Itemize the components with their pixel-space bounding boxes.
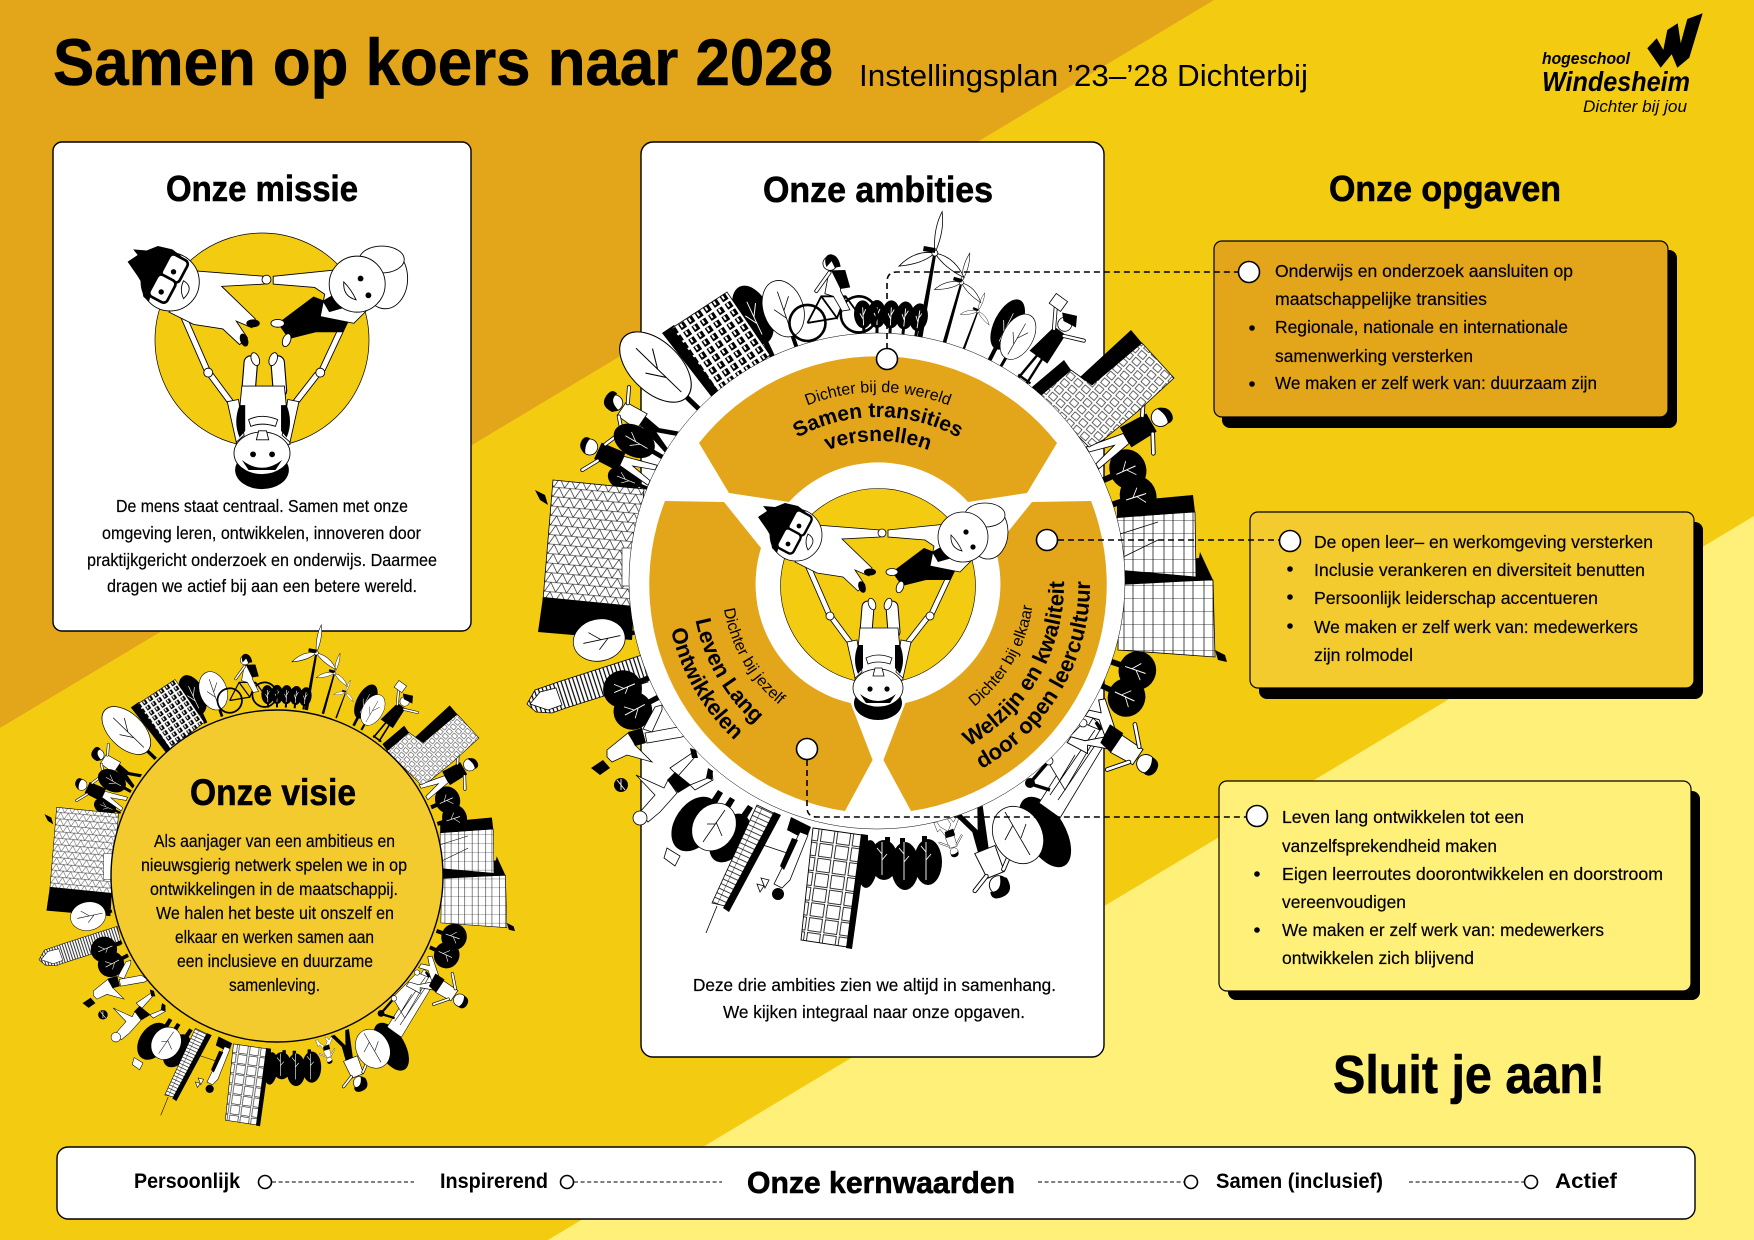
text: visie bbox=[141, 831, 407, 995]
panel: onze kernwaarden bbox=[57, 1147, 1695, 1219]
connector: jezelf to opgave 3 bbox=[796, 738, 1268, 826]
panel: opgave 2: zijn rolmodel bbox=[1314, 645, 1413, 665]
value: samen (inclusief): Samen (inclusief) bbox=[1216, 1170, 1383, 1193]
panel: opgave 1 bbox=[1214, 241, 1677, 428]
logo: Windesheim: Windesheim bbox=[1542, 66, 1690, 97]
visie disc bbox=[111, 710, 443, 1042]
segment: welzijn en kwaliteit: Welzijn en kwaliteit bbox=[960, 581, 1064, 745]
text: missie: omgeving leren, ontwikkelen, innoveren door bbox=[102, 523, 421, 543]
logo: Windesheim: Dichter bij jou bbox=[1583, 97, 1688, 116]
panel: onze missie bbox=[53, 142, 471, 631]
illustration: ring of city and people bbox=[527, 206, 1227, 949]
segment: leven lang ontwikkelen bbox=[649, 501, 873, 811]
segment: samen transities versnellen: Samen transities bbox=[793, 403, 962, 436]
text: visie: ontwikkelingen in de maatschappij. bbox=[150, 879, 398, 899]
value: inspirerend: Inspirerend bbox=[440, 1170, 548, 1193]
panel: opgave 3: vereenvoudigen bbox=[1282, 892, 1406, 912]
title: Samen op koers naar 2028 bbox=[53, 25, 833, 99]
segment: leven lang ontwikkelen: Ontwikkelen bbox=[672, 628, 740, 740]
segment: samen transities versnellen: versnellen bbox=[824, 426, 930, 450]
text: ambities samenhang bbox=[693, 975, 1056, 1022]
text: missie: De mens staat centraal. Samen met onze bbox=[116, 496, 408, 516]
call to action: Sluit je aan! bbox=[1333, 1045, 1605, 1105]
text: visie: een inclusieve en duurzame bbox=[177, 951, 373, 971]
text: ambities samenhang: We kijken integraal naar onze opgaven. bbox=[723, 1002, 1025, 1022]
segment: samen transities versnellen bbox=[699, 356, 1057, 502]
panel: opgave 1: We maken er zelf werk van: duurzaam zijn bbox=[1275, 373, 1597, 393]
segment: leven lang ontwikkelen: Leven Lang bbox=[696, 618, 762, 725]
panel: opgave 1: Regionale, nationale en internationale bbox=[1275, 317, 1568, 337]
panel: opgave 1: maatschappelijke transities bbox=[1275, 289, 1487, 309]
text: visie: We halen het beste uit onszelf en bbox=[156, 903, 394, 923]
panel: opgave 2: Inclusie verankeren en diversiteit benutten bbox=[1314, 560, 1645, 580]
segment: welzijn en kwaliteit: door open leercultuur bbox=[978, 582, 1090, 768]
illustration: three people holding hands bbox=[758, 503, 1008, 720]
panel: opgave 2: De open leer– en werkomgeving versterken bbox=[1314, 532, 1653, 552]
value: persoonlijk: Persoonlijk bbox=[134, 1170, 240, 1193]
panel: opgave 3: We maken er zelf werk van: medewerkers bbox=[1282, 920, 1604, 940]
text: missie: dragen we actief bij aan een betere wereld. bbox=[107, 576, 417, 596]
segment: leven lang ontwikkelen: Dichter bij jezelf bbox=[724, 608, 787, 704]
logo: Windesheim: hogeschool bbox=[1542, 49, 1631, 68]
panel: opgave 3: Leven lang ontwikkelen tot een bbox=[1282, 807, 1524, 827]
value: persoonlijk bbox=[134, 1170, 414, 1193]
panel: opgave 3: ontwikkelen zich blijvend bbox=[1282, 948, 1474, 968]
text: ambities samenhang: Deze drie ambities zien we altijd in samenhang. bbox=[693, 975, 1056, 995]
panel: opgave 1: samenwerking versterken bbox=[1275, 346, 1473, 366]
panel: onze visie bbox=[39, 621, 515, 1126]
panel: opgave 3: Eigen leerroutes doorontwikkelen en doorstroom bbox=[1282, 864, 1663, 884]
text: visie: Als aanjager van een ambitieus en bbox=[154, 831, 395, 851]
connector: elkaar to opgave 2 bbox=[1036, 530, 1300, 552]
panel: opgave 3 bbox=[1219, 781, 1700, 1000]
segment: samen transities versnellen: Dichter bij de wereld bbox=[804, 380, 952, 406]
value: actief: Actief bbox=[1555, 1170, 1618, 1193]
connector: wereld to opgave 1 bbox=[876, 262, 1260, 370]
heading: onze opgaven: Onze opgaven bbox=[1329, 168, 1561, 209]
panel: opgave 2: We maken er zelf werk van: medewerkers bbox=[1314, 617, 1638, 637]
segment: welzijn en kwaliteit bbox=[883, 501, 1107, 811]
subtitle: Instellingsplan ’23–’28 Dichterbij bbox=[859, 58, 1308, 93]
text: visie: samenleving. bbox=[229, 975, 320, 995]
heading: onze kernwaarden: Onze kernwaarden bbox=[747, 1165, 1015, 1200]
heading: onze visie: Onze visie bbox=[190, 772, 356, 813]
logo: Windesheim bbox=[1542, 13, 1703, 116]
segment: welzijn en kwaliteit: Dichter bij elkaar bbox=[968, 604, 1032, 706]
text: missie bbox=[87, 496, 437, 596]
value: actief bbox=[1409, 1170, 1618, 1193]
heading: onze ambities: Onze ambities bbox=[763, 169, 993, 210]
panel: opgave 1: Onderwijs en onderzoek aansluiten op bbox=[1275, 261, 1573, 281]
heading: onze missie: Onze missie bbox=[166, 168, 358, 209]
panel: onze ambities bbox=[526, 141, 1227, 1058]
panel: opgave 2: Persoonlijk leiderschap accentueren bbox=[1314, 588, 1598, 608]
panel: opgave 3: vanzelfsprekendheid maken bbox=[1282, 836, 1497, 856]
inner disc bbox=[780, 488, 976, 684]
ambitie wheel disc bbox=[629, 333, 1125, 829]
text: visie: nieuwsgierig netwerk spelen we in op bbox=[141, 855, 407, 875]
illustration: ring of city and people bbox=[39, 621, 515, 1126]
text: missie: praktijkgericht onderzoek en onderwijs. Daarmee bbox=[87, 550, 437, 570]
illustration: three people holding hands bbox=[128, 233, 408, 489]
panel: opgave 2 bbox=[1250, 512, 1703, 699]
value: inspirerend bbox=[440, 1170, 722, 1193]
value: samen (inclusief) bbox=[1038, 1170, 1383, 1193]
text: visie: elkaar en werken samen aan bbox=[175, 927, 374, 947]
